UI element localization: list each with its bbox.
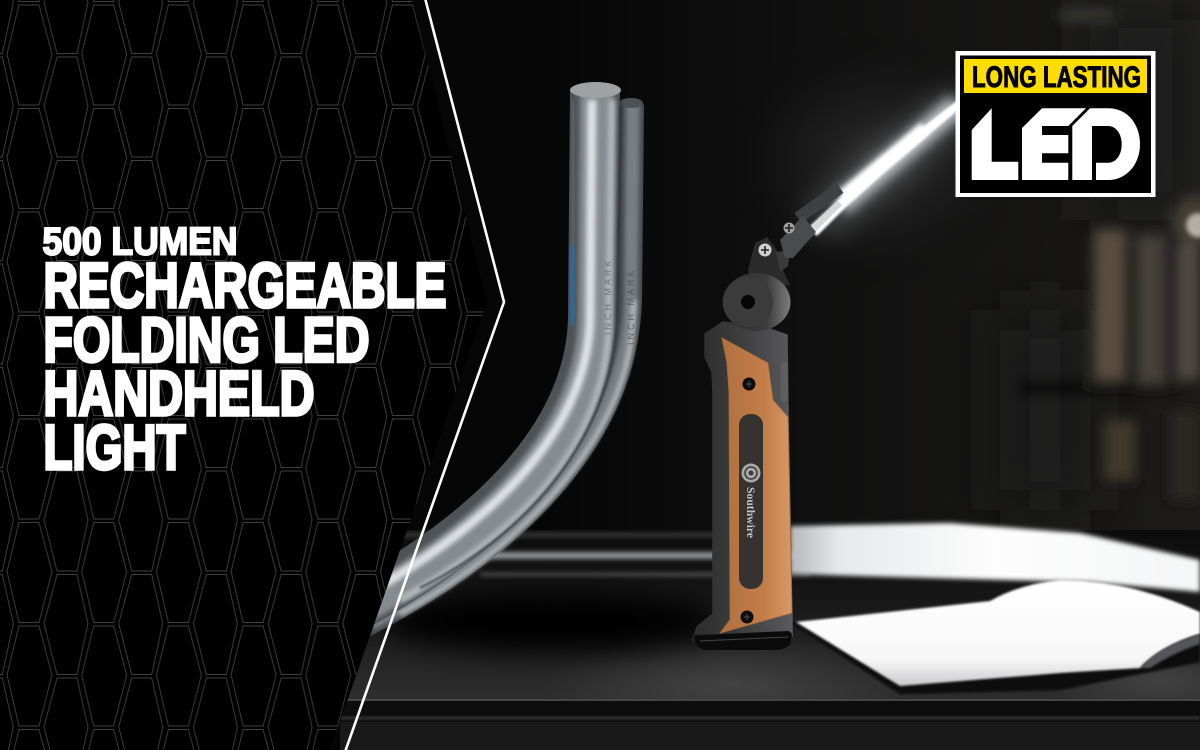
orange grip (720, 338, 792, 633)
label text: LONG LASTING (972, 61, 1141, 94)
metal conduit pipes (356, 82, 643, 628)
open notebook (790, 580, 1200, 694)
pipe print: INCH MARK (626, 267, 636, 345)
bright reflected light band (790, 523, 1200, 592)
dark logo slot (739, 414, 763, 589)
title line: rechargeable: RECHARGEABLE (44, 251, 446, 321)
pipe print: INCH MARK (603, 257, 613, 335)
blue marking (570, 245, 574, 325)
LED light beam (798, 100, 958, 236)
base rim (694, 631, 792, 650)
table light pool (540, 635, 920, 735)
title (42, 220, 446, 483)
brand name: Southwire (744, 487, 758, 539)
screws (740, 378, 756, 624)
title line: light: LIGHT (44, 413, 186, 483)
LED logotype (972, 108, 1140, 180)
left black panel (0, 0, 487, 750)
handle body (693, 322, 792, 648)
table top (340, 530, 1200, 750)
table front edge (340, 700, 1200, 750)
logo mark (742, 464, 760, 482)
back pipe (360, 104, 634, 628)
title line: folding led: FOLDING LED (44, 306, 370, 376)
folding LED work light (693, 216, 816, 650)
white arrow outline (345, 0, 504, 750)
title line: 500 lumen: 500 LUMEN (42, 220, 238, 264)
pivot head (722, 273, 790, 331)
front pipe (356, 90, 621, 608)
yellow label (964, 59, 1147, 93)
side button (781, 362, 788, 402)
swivel joint (748, 216, 816, 290)
hexagon pattern (0, 0, 500, 750)
long lasting LED badge (956, 51, 1156, 197)
title line: handheld: HANDHELD (44, 359, 314, 429)
front pipe cut end (570, 82, 621, 98)
shadow on table (380, 592, 720, 652)
